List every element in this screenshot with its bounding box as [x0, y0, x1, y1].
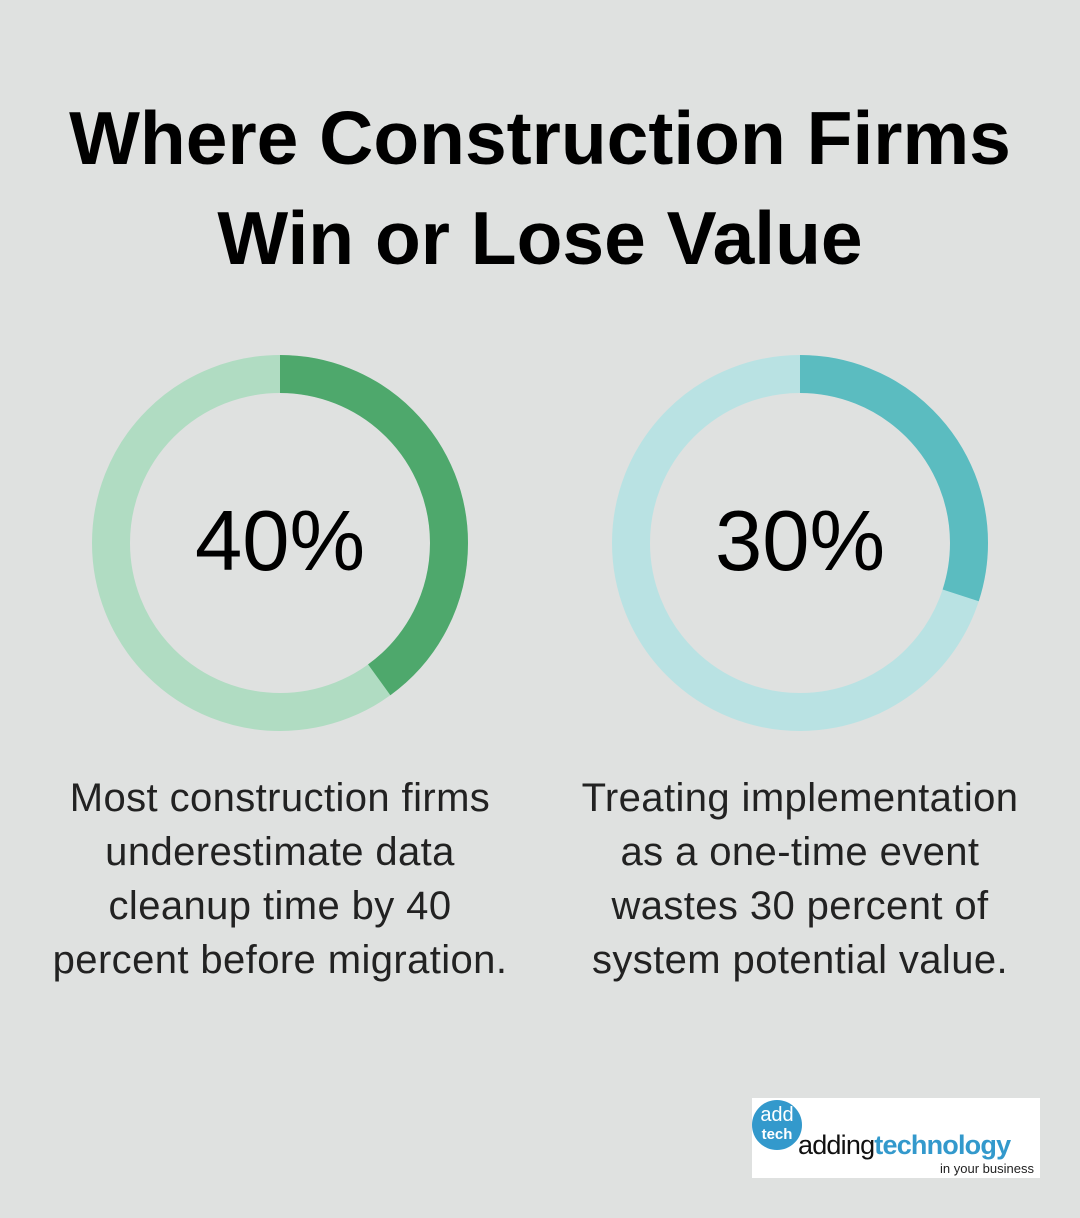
title — [69, 96, 1011, 280]
logo — [752, 1098, 1040, 1178]
donut left — [111, 374, 449, 712]
logo: tech — [762, 1126, 792, 1143]
text: left description: cleanup time by 40 — [109, 884, 451, 928]
donut right: 30% — [715, 494, 885, 589]
text: right description: Treating implementation — [582, 776, 1018, 820]
donut left: 40% — [195, 494, 365, 589]
text: left description: Most construction firms — [70, 776, 490, 820]
logo: addingtechnology — [798, 1130, 1010, 1160]
donut right — [631, 374, 969, 712]
text: left description: percent before migration. — [53, 938, 507, 982]
title: Where Construction Firms — [69, 96, 1011, 180]
text: left description — [53, 776, 507, 982]
text: right description: wastes 30 percent of — [611, 884, 989, 928]
logo: in your business — [940, 1161, 1034, 1176]
text: right description — [582, 776, 1018, 982]
text: right description: system potential value. — [592, 938, 1008, 982]
chart: donuts — [92, 355, 988, 731]
logo: add — [760, 1104, 794, 1126]
title: Win or Lose Value — [217, 196, 863, 280]
text: right description: as a one-time event — [621, 830, 979, 874]
text: left description: underestimate data — [105, 830, 455, 874]
